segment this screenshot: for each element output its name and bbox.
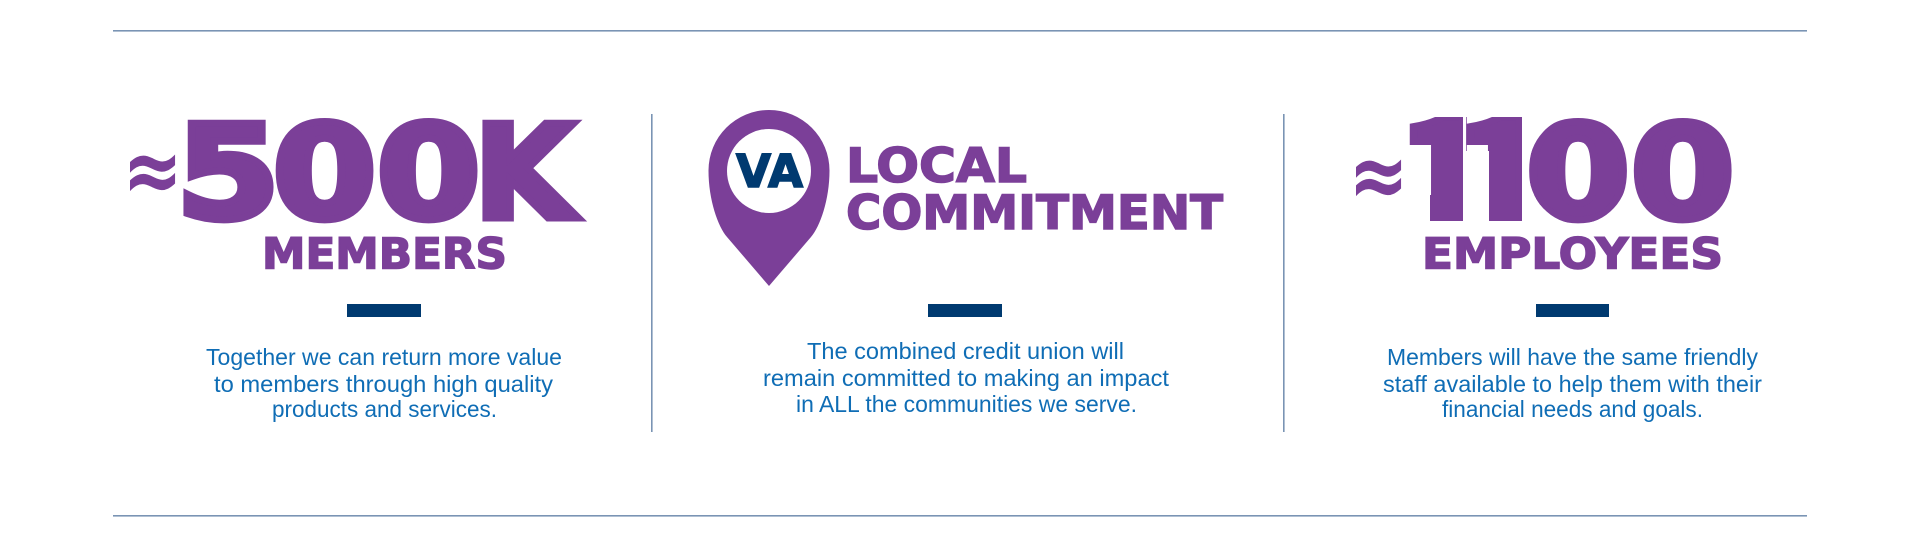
- stat: approximately 1100: 00: [1526, 98, 1735, 250]
- stat: approximately 1100: 11: [1398, 61, 1550, 257]
- heading: members: MEMBERS: [262, 230, 507, 280]
- stat: approximately 1100: ≈: [1348, 123, 1409, 228]
- description: [763, 338, 1170, 417]
- stat: approximately 500K: K: [474, 97, 579, 249]
- heading: local commitment: COMMITMENT: [846, 186, 1223, 241]
- description: Members will have the same friendly: [1387, 344, 1758, 370]
- accent bar: [347, 304, 421, 317]
- heading: local commitment: LOCAL: [846, 139, 1027, 194]
- panel: local commitment: [708, 110, 1223, 417]
- stat: approximately 500K: [122, 97, 579, 250]
- description: [1383, 344, 1762, 422]
- description: products and services.: [272, 396, 497, 422]
- heading: employees: EMPLOYEES: [1422, 230, 1723, 280]
- description: [206, 344, 562, 422]
- icon: map pin with VA: [708, 110, 830, 286]
- description: The combined credit union will: [807, 338, 1124, 364]
- stat: approximately 500K: 500: [176, 98, 481, 250]
- panel: employees: [1356, 117, 1762, 422]
- description: financial needs and goals.: [1442, 396, 1703, 422]
- description: Together we can return more value: [206, 344, 562, 370]
- panel: members: [122, 97, 579, 422]
- description: to members through high quality: [214, 371, 554, 397]
- description: in ALL the communities we serve.: [796, 391, 1137, 417]
- accent bar: [928, 304, 1002, 317]
- stat: approximately 1100: [1356, 117, 1732, 224]
- icon: map pin with VA: VA: [736, 145, 803, 198]
- stat: approximately 500K: ≈: [122, 118, 183, 223]
- description: staff available to help them with their: [1383, 371, 1762, 397]
- heading: local commitment: [846, 139, 1223, 241]
- description: remain committed to making an impact: [763, 365, 1170, 391]
- accent bar: [1536, 304, 1609, 317]
